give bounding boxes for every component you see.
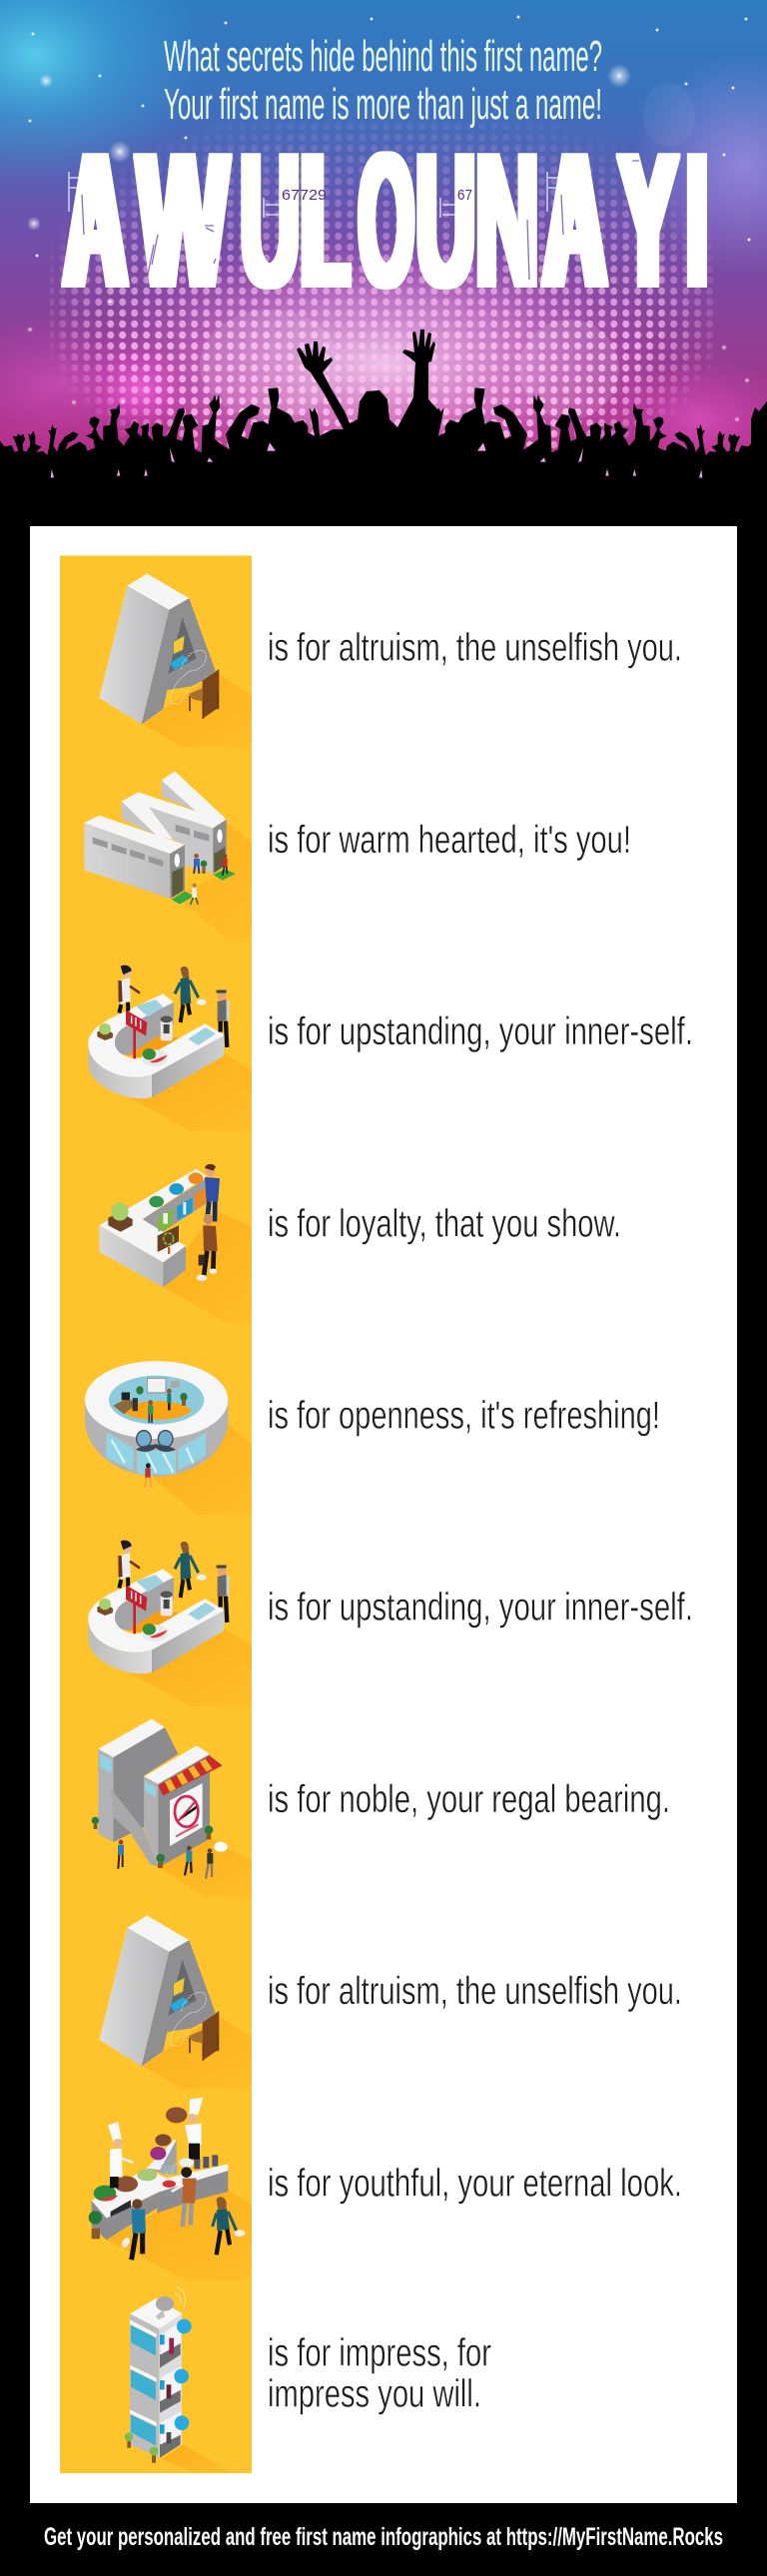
icon: letter O openness ring building — [85, 1361, 252, 1515]
person in blue — [120, 2199, 146, 2259]
A side face — [99, 586, 169, 725]
striped awning — [158, 1755, 223, 1795]
woman in white — [118, 966, 140, 1012]
title: AWULOUNAYI: U — [240, 115, 300, 326]
side windows — [100, 1754, 156, 1797]
food jars — [162, 2155, 218, 2175]
icon: letter U upstanding counter (repeat) — [88, 1541, 252, 1706]
W top faces — [84, 771, 227, 854]
icon: letter Y youthful buffet — [89, 2098, 252, 2280]
cakes — [137, 2134, 171, 2181]
chart board — [147, 1378, 180, 1393]
title: AWULOUNAYI: A — [544, 115, 605, 326]
chair — [189, 669, 219, 719]
O glass panels — [106, 1433, 206, 1475]
display glass — [136, 999, 163, 1016]
N top faces — [98, 1719, 165, 1757]
N right front — [158, 1754, 210, 1868]
shadow — [150, 1425, 252, 1515]
L end wall — [163, 1246, 186, 1287]
text: I — [685, 115, 709, 326]
man in blue — [205, 1164, 220, 1221]
title: AWULOUNAYI: U — [415, 115, 475, 326]
green mats — [172, 892, 194, 905]
counter top — [92, 2164, 228, 2219]
text: L: is for loyalty, that you show. — [268, 1202, 621, 1245]
man in vest — [217, 990, 230, 1047]
N right side — [144, 1776, 158, 1868]
doors and rest figures — [172, 830, 225, 897]
icon: letter U upstanding counter — [88, 966, 252, 1131]
plant box — [97, 1023, 113, 1040]
header: concert background — [0, 0, 767, 494]
shadow — [162, 2444, 232, 2473]
trash can — [161, 1016, 173, 1040]
meat dishes — [94, 2107, 187, 2202]
yellow illustration column — [60, 555, 252, 2473]
people — [118, 1840, 228, 1879]
woman in teal — [213, 2197, 245, 2254]
yellow screen — [173, 635, 185, 655]
O top face — [85, 1361, 228, 1439]
icon: letter I impress tower — [125, 2286, 232, 2473]
O courtyard — [109, 1376, 204, 1425]
potted plants — [92, 1817, 213, 1868]
shadow — [143, 673, 252, 748]
tower top face — [130, 2298, 183, 2328]
icon: letter W warm hearted building — [84, 771, 252, 940]
icon: letter A altruism building — [99, 573, 252, 748]
central raised-hands figure — [297, 329, 439, 469]
glasses and mustache — [136, 1431, 176, 1452]
content panel — [30, 526, 737, 2503]
title: AWULOUNAYI — [65, 115, 709, 326]
text: I line 1: is for impress, for — [268, 2331, 491, 2374]
rooms — [160, 2343, 181, 2458]
tower windows — [131, 2324, 156, 2445]
U outer side — [88, 1035, 224, 1098]
N back face — [113, 1727, 178, 1842]
A window — [168, 617, 197, 674]
text: I line 2: impress you will. — [268, 2373, 481, 2416]
tower left face — [130, 2313, 159, 2458]
title: AWULOUNAYI: W — [138, 115, 228, 326]
L front wall — [99, 1225, 163, 1287]
watermelon plate — [142, 1048, 168, 1066]
staff — [160, 2334, 174, 2443]
woman in teal — [175, 966, 207, 1022]
sign — [126, 1009, 147, 1058]
plant box — [108, 1202, 133, 1232]
tower right face — [159, 2313, 182, 2458]
plant and free sign — [89, 2200, 131, 2239]
icon: letter A altruism building (repeat) — [99, 1915, 252, 2090]
U inner wall and floor — [113, 1002, 174, 1055]
left chef — [108, 2122, 133, 2188]
W rear wall — [149, 807, 213, 874]
cake stand — [147, 2140, 177, 2174]
recycling sign — [158, 1225, 179, 1254]
crowd silhouette — [0, 329, 767, 529]
recycling bins — [149, 1172, 207, 1232]
no smoking sign — [170, 1783, 203, 1846]
cables — [170, 650, 206, 704]
N left side — [98, 1749, 113, 1842]
shadow — [93, 822, 252, 940]
desk — [113, 1392, 138, 1414]
windows — [93, 825, 209, 867]
man in brown — [197, 1214, 218, 1281]
title: AWULOUNAYI: 67 — [457, 187, 472, 204]
title: AWULOUNAYI: O — [359, 115, 414, 326]
W inner faces — [122, 802, 157, 836]
A top face — [127, 573, 189, 610]
counter walls — [92, 2194, 157, 2240]
title: AWULOUNAYI: Y — [619, 115, 677, 326]
right chef — [185, 2098, 203, 2160]
A front face — [142, 598, 216, 725]
title: AWULOUNAYI: N — [475, 115, 539, 326]
W end faces — [170, 845, 185, 899]
O side wall — [85, 1400, 228, 1477]
shadow — [133, 1839, 252, 1898]
person at door — [145, 1463, 152, 1488]
U top face — [88, 993, 225, 1077]
title: AWULOUNAYI: 67729 — [282, 187, 327, 204]
shadow — [163, 1211, 252, 1323]
title: AWULOUNAYI: A — [65, 115, 126, 326]
small plants — [125, 2432, 158, 2463]
blue desk — [170, 655, 189, 670]
L top face — [99, 1169, 207, 1262]
icon: letter L loyalty recycling counter — [99, 1164, 252, 1323]
title: AWULOUNAYI: L — [302, 115, 348, 326]
L inner wall — [143, 1178, 207, 1245]
blue bubbles — [174, 2319, 192, 2430]
person in orange — [163, 2158, 197, 2227]
icon: letter N noble building — [92, 1719, 252, 1898]
N diagonal — [111, 1789, 158, 1867]
shadow — [125, 1053, 252, 1131]
shadow — [107, 2190, 252, 2280]
plants and staff — [136, 1386, 188, 1423]
satellite dish — [156, 2286, 185, 2319]
W left wall — [84, 823, 171, 899]
people and plant — [191, 854, 228, 905]
text: W: is for warm hearted, it's you! — [268, 819, 631, 862]
